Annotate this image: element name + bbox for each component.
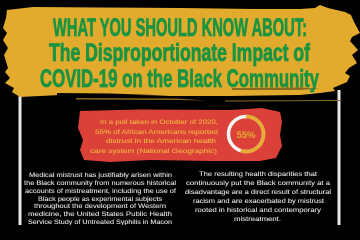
title text — [40, 14, 319, 93]
text block: medical mistrust: Medical mistrust has justifiably arisen within — [29, 172, 173, 179]
text block: health disparities: rooted in historical and contemporary — [195, 207, 322, 214]
poll text — [90, 119, 219, 155]
text block: medical mistrust: medicine, the United States Public Health — [28, 211, 173, 218]
text block: medical mistrust: the Black community from numerous historical — [24, 180, 176, 187]
black brush streak — [57, 93, 170, 96]
text block: medical mistrust: accounts of mistreatment, including the use of — [25, 188, 176, 195]
gold brush streaks — [76, 98, 340, 102]
donut chart: 55%: 55% — [236, 130, 256, 141]
text block: health disparities — [185, 171, 331, 223]
white frame lines — [18, 90, 340, 225]
poll text: care system (National Geographic) — [90, 148, 217, 155]
text block: health disparities: continuously put the Black community at a — [186, 180, 331, 187]
text block: health disparities: mistreatment. — [234, 216, 281, 223]
poll text: In a poll taken in October of 2020, — [100, 119, 218, 126]
text block: medical mistrust: throughout the development of Western — [34, 203, 167, 210]
poll text: distrust in the American health — [106, 138, 217, 145]
text block: medical mistrust: Black people as experimental subjects — [38, 196, 162, 203]
text block: health disparities: racism and are exacerbated by mistrust — [193, 198, 324, 205]
brush background — [3, 5, 360, 97]
donut chart: 55% — [228, 116, 264, 152]
text block: health disparities: disadvantage are a direct result of structural — [185, 189, 331, 196]
text block: health disparities: The resulting health disparities that — [199, 171, 317, 178]
text block: medical mistrust — [24, 172, 176, 226]
poll text: 55% of African Americans reported — [95, 129, 219, 136]
callout: poll statistic — [78, 108, 282, 162]
red brush background — [78, 108, 282, 162]
title banner — [3, 5, 360, 97]
brown brush streak — [232, 88, 320, 90]
